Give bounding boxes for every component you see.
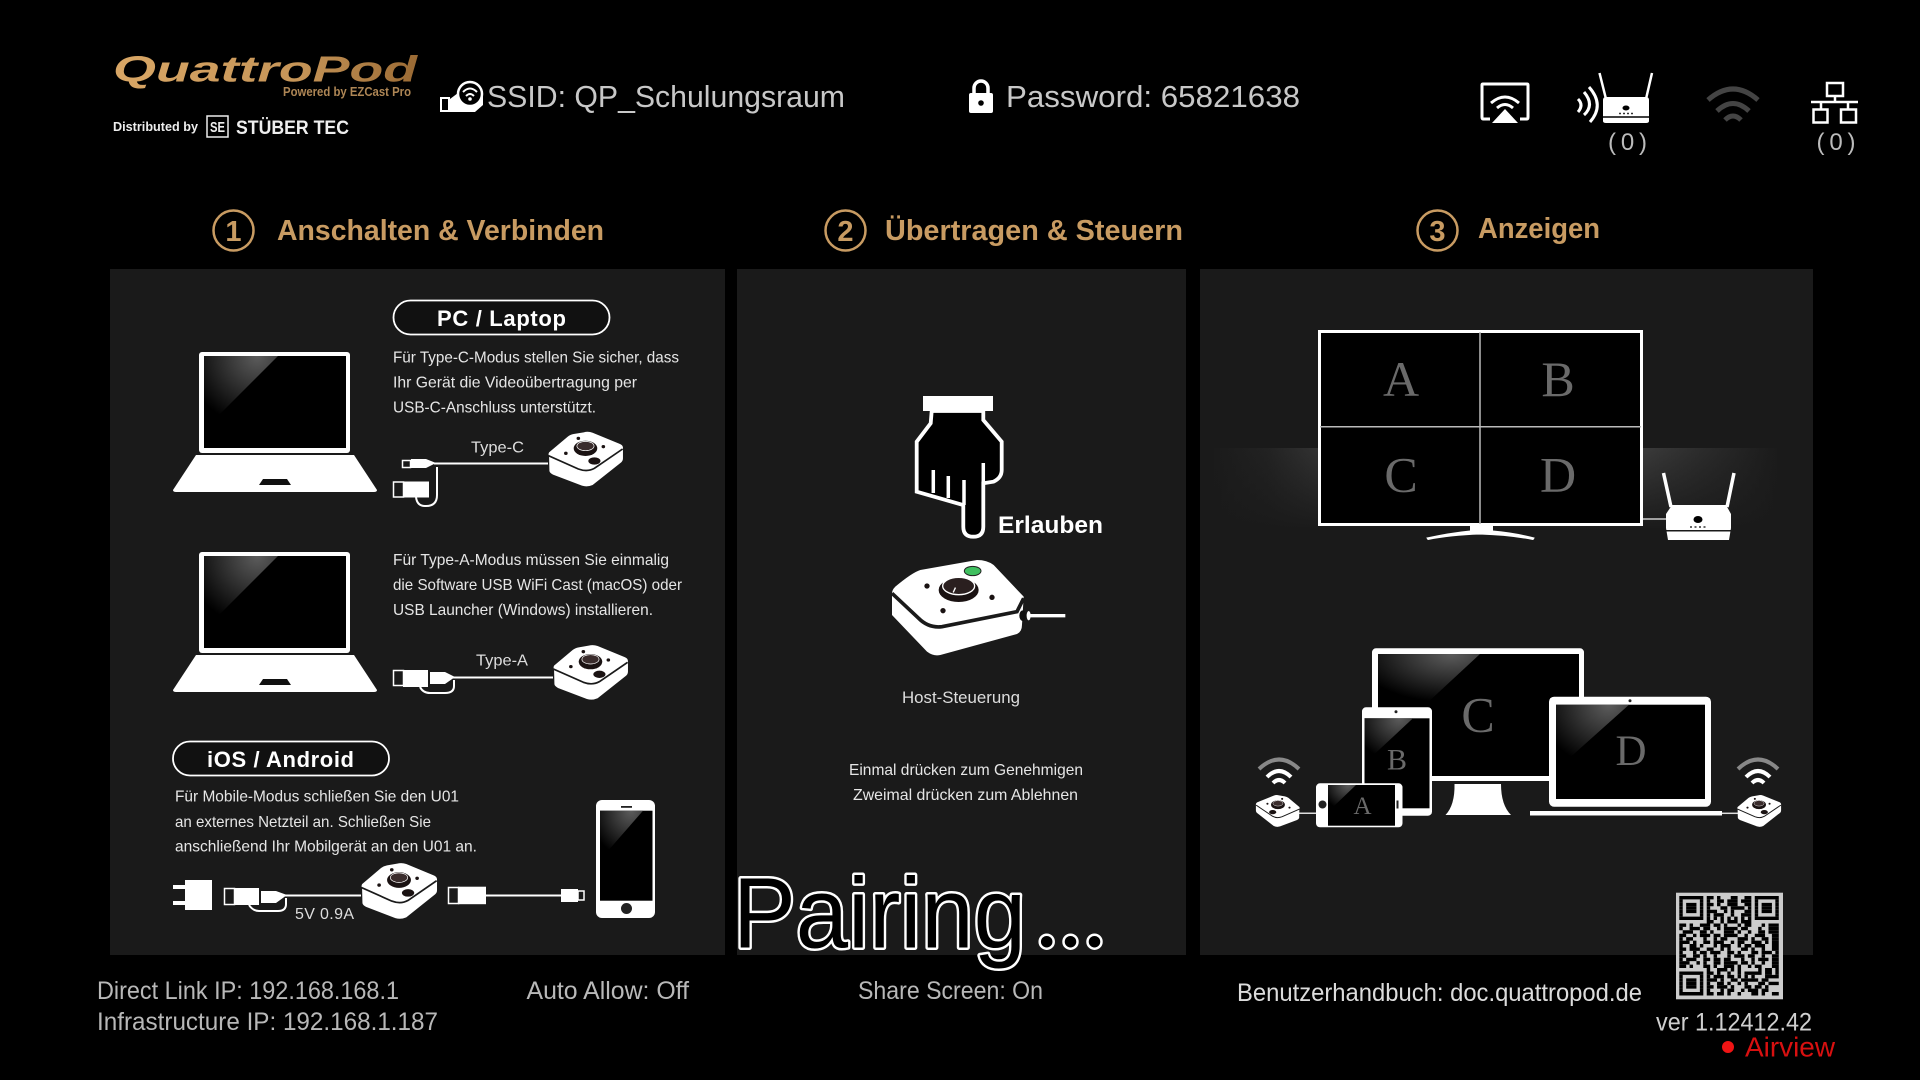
footer: auto allow: Auto Allow: Off (526, 977, 689, 1005)
heading: step 2: 2 (837, 216, 854, 248)
heading: step 1 (214, 210, 604, 250)
header logo: QuattroPod: SE (210, 119, 225, 136)
heading: step 3: Anzeigen (1478, 213, 1600, 245)
type-c instructions: USB-C-Anschluss unterstützt. (393, 400, 596, 417)
footer: direct link ip: Direct Link IP: 192.168.168.1 (97, 977, 399, 1005)
mobile cable diagram: 5V 0.9A (295, 906, 354, 923)
ios android label: iOS / Android (207, 747, 354, 772)
mobile instructions: an externes Netzteil an. Schließen Sie (175, 814, 431, 831)
router beside tv (1643, 473, 1734, 540)
header logo: QuattroPod: QuattroPod (113, 48, 419, 90)
mobile cable diagram (173, 863, 584, 923)
heading: step 2 (826, 210, 1183, 250)
password text: Password: 65821638 (1006, 79, 1300, 114)
left dongle with wifi (1256, 760, 1316, 827)
heading: step 3 (1418, 210, 1600, 250)
icon: lock (969, 81, 993, 113)
phone a (1316, 783, 1402, 827)
type-a instructions: USB Launcher (Windows) installieren. (393, 602, 653, 619)
type-a cable diagram (394, 645, 628, 700)
footer: manual link: Benutzerhandbuch: doc.quattropod.de (1237, 979, 1642, 1007)
panel: connect (110, 269, 725, 955)
icon: lan network with count: ( 0 ) (1816, 129, 1856, 156)
header logo: QuattroPod: Distributed by (113, 119, 199, 134)
airview status: Airview (1745, 1032, 1836, 1063)
panel: control (737, 269, 1186, 955)
icon: lan network with count (1811, 83, 1858, 156)
mobile instructions: anschließend Ihr Mobilgerät an den U01 an. (175, 839, 477, 856)
type-a cable diagram: Type-A (476, 653, 528, 670)
panel: display (1200, 269, 1813, 955)
icon: pointing hand (917, 396, 1002, 537)
mobile instructions (175, 789, 477, 856)
type-c instructions: Ihr Gerät die Videoübertragung per (393, 375, 638, 392)
version: ver 1.12412.42 (1656, 1009, 1812, 1037)
type-a instructions: die Software USB WiFi Cast (macOS) oder (393, 577, 683, 594)
type-a instructions (393, 552, 683, 619)
footer: share screen: Share Screen: On (858, 977, 1043, 1005)
laptop d: D (1615, 728, 1647, 775)
laptop d (1530, 697, 1738, 816)
quad view tv (1320, 332, 1642, 540)
press instructions: Einmal drücken zum Genehmigen (849, 762, 1083, 779)
phone illustration (596, 800, 655, 918)
heading: step 1: Anschalten & Verbinden (277, 215, 604, 247)
type-c cable diagram (394, 432, 623, 506)
laptop illustration 2 (173, 552, 377, 692)
type-a instructions: Für Type-A-Modus müssen Sie einmalig (393, 552, 669, 569)
device with green led (892, 560, 1065, 655)
quad view tv: C (1384, 446, 1418, 502)
quad view tv: D (1540, 446, 1576, 502)
header logo: QuattroPod (113, 48, 419, 139)
type-c instructions: Für Type-C-Modus stellen Sie sicher, dass (393, 350, 679, 367)
icon: airplay (1482, 84, 1528, 123)
host control label: Host-Steuerung (902, 688, 1020, 707)
mobile instructions: Für Mobile-Modus schließen Sie den U01 (175, 789, 459, 806)
monitor c: C (1461, 686, 1495, 742)
allow label: Erlauben (998, 512, 1103, 539)
heading: step 1: 1 (225, 216, 242, 248)
monitor c (1372, 648, 1584, 815)
header logo: QuattroPod: STÜBER TEC (236, 118, 349, 139)
icon: router with signal and count: ( 0 ) (1608, 129, 1647, 156)
press instructions: Zweimal drücken zum Ablehnen (853, 787, 1078, 804)
heading: step 3: 3 (1429, 216, 1446, 248)
footer: infrastructure ip: Infrastructure IP: 192.168.1.187 (97, 1008, 438, 1036)
ios android label (173, 742, 389, 776)
type-c cable diagram: Type-C (471, 439, 524, 456)
heading: step 2: Übertragen & Steuern (885, 214, 1183, 247)
SSID text: SSID: QP_Schulungsraum (487, 79, 845, 114)
right dongle with wifi (1737, 760, 1781, 827)
icon: dongle with wifi (441, 82, 483, 112)
icon: router with signal and count (1578, 73, 1652, 156)
pairing status: ... (1035, 858, 1107, 970)
pairing status: Pairing (733, 858, 1026, 970)
tablet b: B (1387, 743, 1407, 776)
press instructions (849, 762, 1083, 804)
laptop illustration 1 (173, 352, 377, 492)
header logo: QuattroPod: Powered by EZCast Pro (283, 84, 411, 99)
icon: wifi (inactive) (1708, 89, 1758, 120)
quad view tv: B (1541, 351, 1575, 407)
quad view tv: A (1383, 351, 1419, 407)
tablet b (1362, 707, 1432, 816)
phone a: A (1353, 793, 1372, 820)
pc laptop label: PC / Laptop (437, 306, 566, 331)
pc laptop label (394, 300, 610, 334)
glow behind tv (1210, 448, 1780, 530)
qr code (1676, 893, 1783, 999)
type-c instructions (393, 350, 679, 417)
